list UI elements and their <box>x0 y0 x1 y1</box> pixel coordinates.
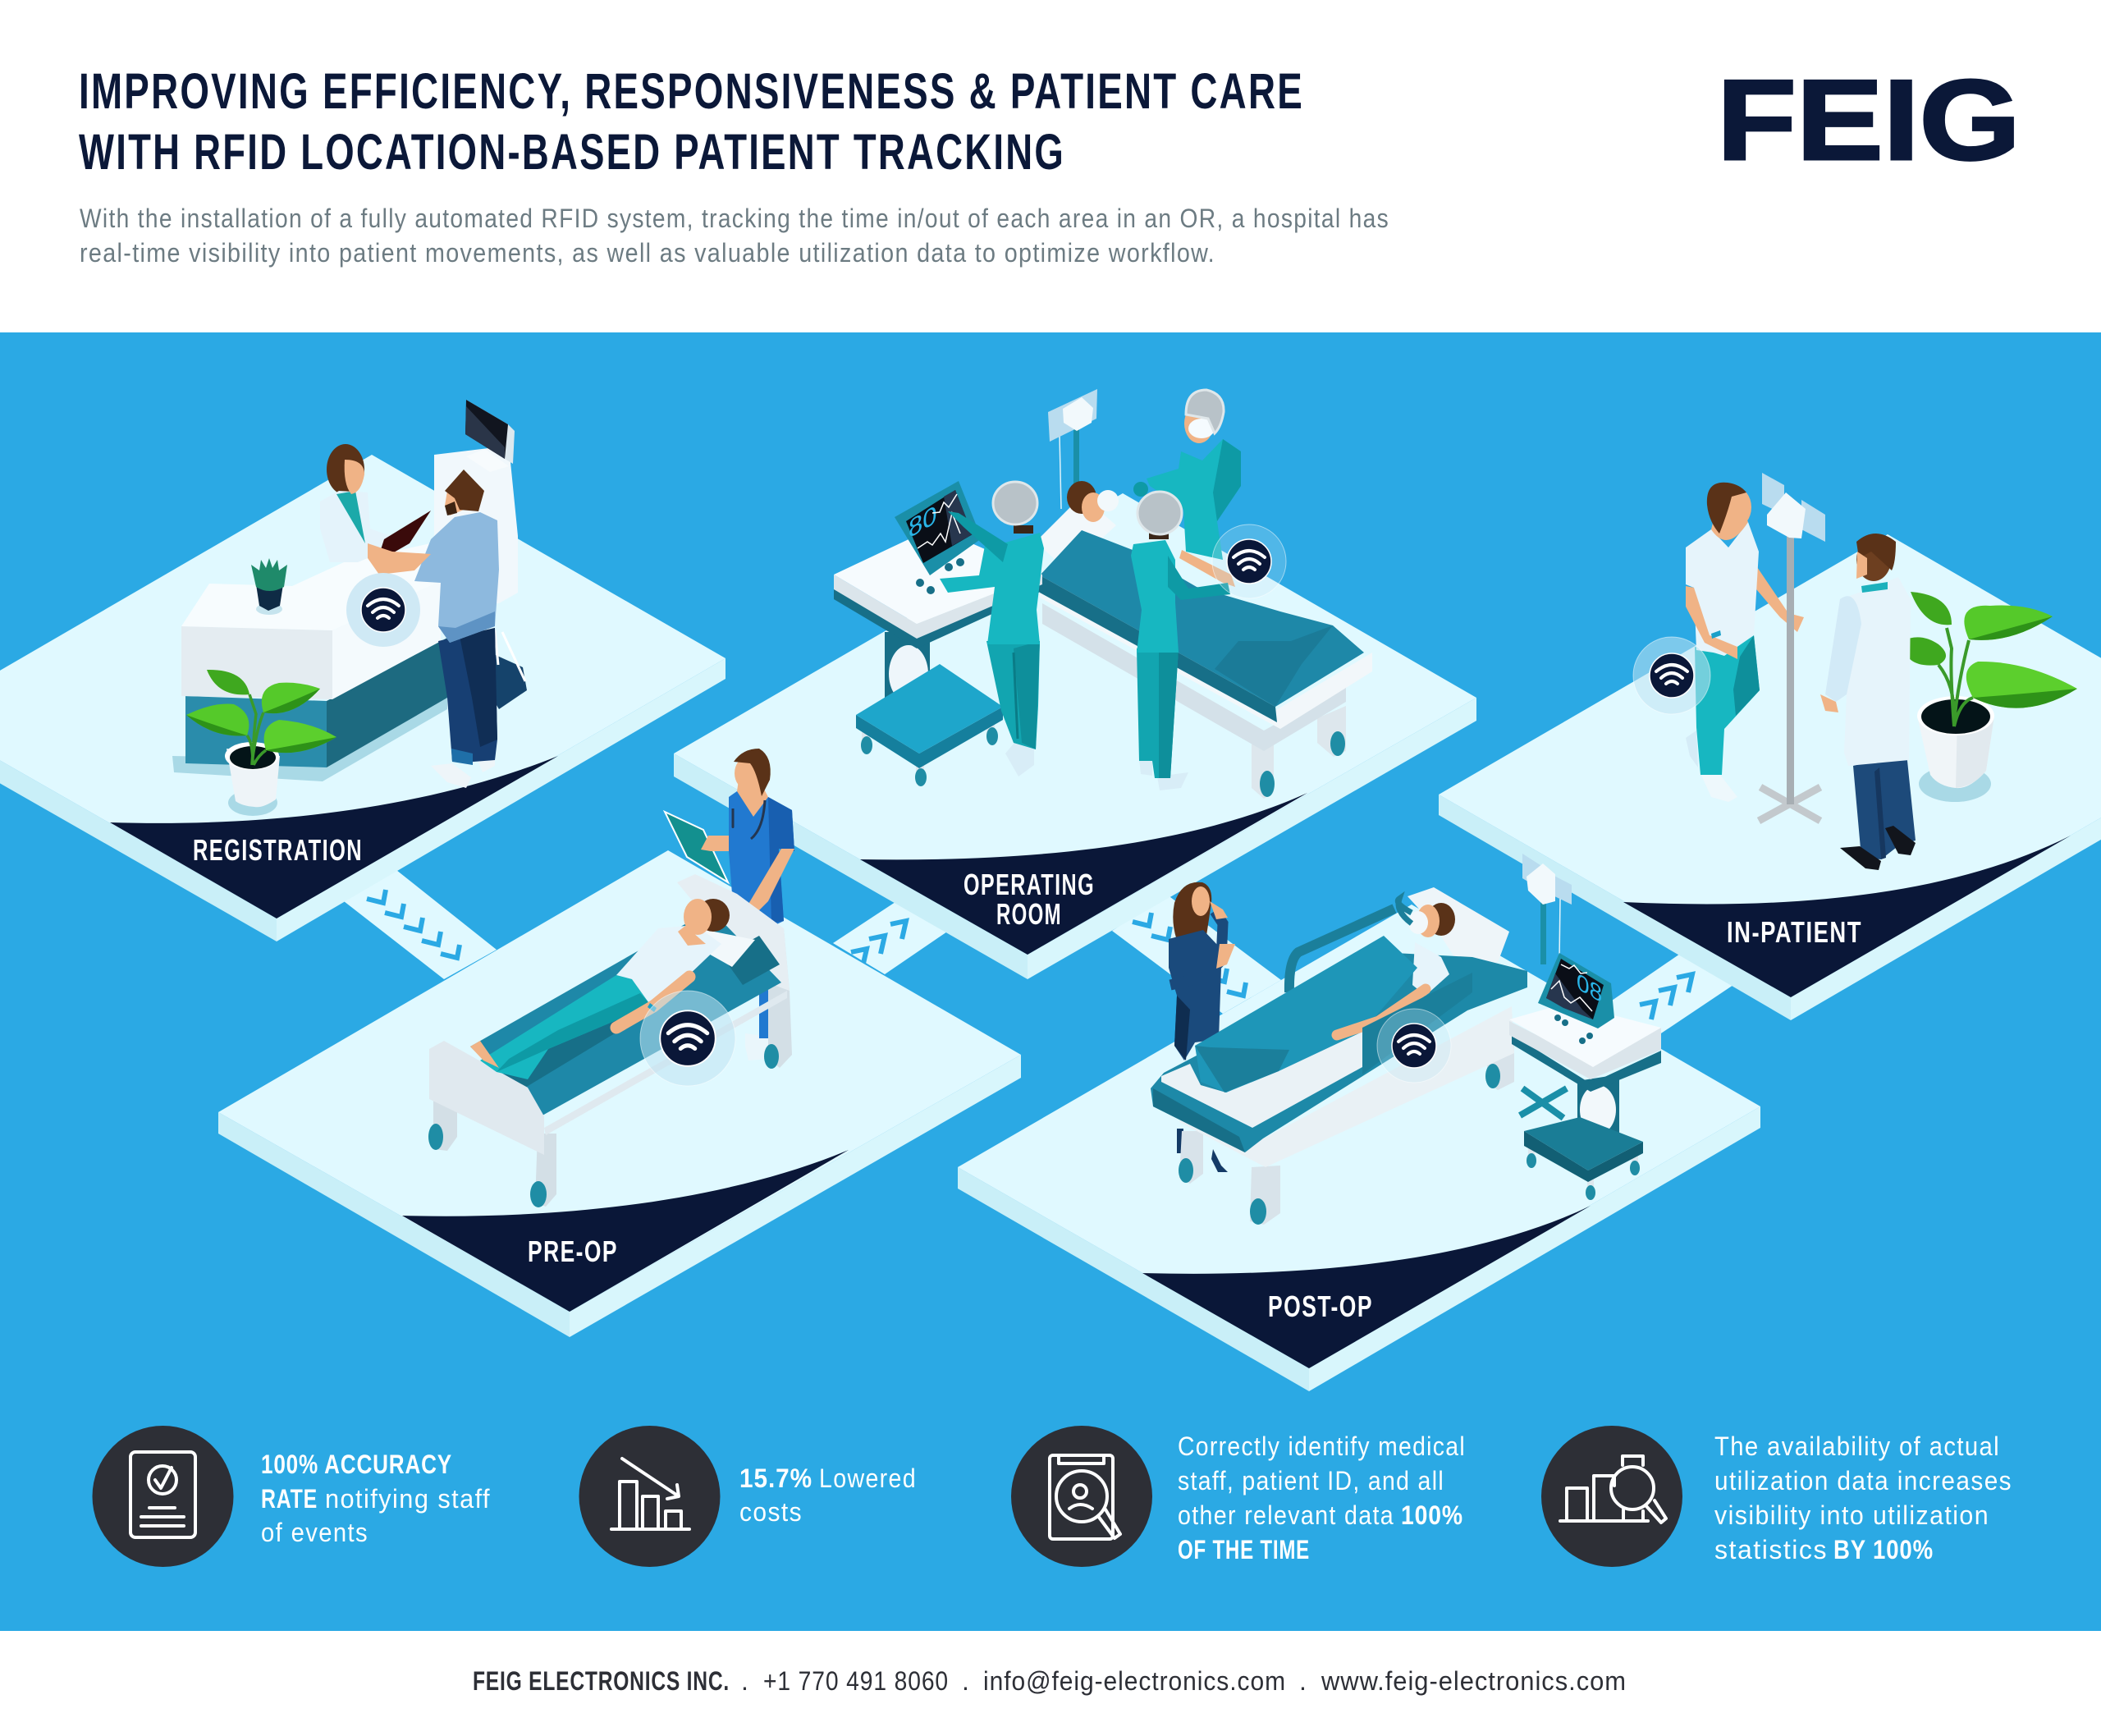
text: accuracy: RATE <box>261 1484 318 1514</box>
desk plant <box>251 558 287 615</box>
tower with monitor <box>434 400 518 603</box>
panel: pre-op <box>218 749 1021 1337</box>
icon: chart magnifier <box>1541 1426 1682 1567</box>
platform: registration <box>0 455 726 941</box>
text: accuracy: notifying staff <box>325 1484 491 1514</box>
patient monitor cart: post-op: 08 <box>1577 969 1602 1008</box>
footer <box>473 1666 1627 1696</box>
person: patient on bed <box>470 899 755 1079</box>
IV pole: operating room <box>1048 389 1097 509</box>
footer: +1 770 491 8060 <box>763 1666 949 1696</box>
stat: utilization <box>1541 1426 2012 1567</box>
text: lowered costs: costs <box>739 1497 803 1527</box>
panel: operating room <box>674 389 1476 979</box>
logo: FEIG: FEIG <box>1717 57 2021 184</box>
person: patient with IV pole <box>1686 483 1804 802</box>
label banner: pre-op: PRE-OP <box>528 1234 618 1268</box>
text: identify staff: other relevant data <box>1178 1500 1394 1530</box>
panel: registration <box>0 400 726 941</box>
connector: operating room to post-op <box>1112 895 1281 1014</box>
stat: accuracy <box>92 1426 491 1567</box>
label banner: in-patient <box>1623 836 2071 997</box>
platform: pre-op <box>218 850 1021 1337</box>
IV pole: in-patient <box>1759 473 1825 821</box>
person: patient on post-op bed <box>1195 899 1472 1092</box>
icon: RFID pre-op <box>640 991 735 1086</box>
title <box>79 63 1304 180</box>
icon: ID magnifier <box>1011 1426 1152 1567</box>
label banner: post-op: POST-OP <box>1268 1289 1373 1323</box>
person: receptionist <box>320 444 391 562</box>
icon: checked document <box>92 1426 233 1567</box>
patient monitor cart: operating room <box>834 481 1042 786</box>
text: accuracy <box>261 1450 491 1547</box>
footer: FEIG ELECTRONICS INC. <box>473 1666 730 1696</box>
text: utilization: statistics <box>1714 1535 1828 1564</box>
text: utilization: The availability of actual <box>1714 1431 2000 1461</box>
text: identify staff: 100% <box>1401 1500 1463 1530</box>
patient monitor cart: post-op <box>1509 953 1661 1200</box>
label banner: post-op <box>1142 1206 1591 1368</box>
text: identify staff: Correctly identify medical <box>1178 1431 1466 1461</box>
text: lowered costs: 15.7% <box>739 1463 812 1493</box>
label banner: in-patient: IN-PATIENT <box>1727 915 1862 949</box>
label banner: registration <box>110 756 558 918</box>
label banner: operating room: ROOM <box>996 897 1062 931</box>
intro text <box>80 204 1389 268</box>
plant: in-patient <box>1902 592 2077 802</box>
icon: RFID in-patient <box>1633 637 1710 714</box>
text: identify staff: staff, patient ID, and all <box>1178 1466 1444 1496</box>
text: utilization: BY 100% <box>1833 1535 1934 1564</box>
footer: . <box>962 1666 970 1696</box>
blue band <box>0 332 2101 1631</box>
text: identify staff: OF THE TIME <box>1178 1535 1310 1564</box>
text: identify staff <box>1178 1431 1466 1564</box>
stat: lowered costs <box>579 1426 917 1567</box>
footer: info@feig-electronics.com <box>983 1666 1286 1696</box>
IV pole: post-op <box>1522 854 1572 964</box>
connector: pre-op to operating room <box>833 899 952 974</box>
platform: post-op <box>958 905 1760 1391</box>
stat: identify staff <box>1011 1426 1466 1567</box>
connector: registration to pre-op <box>344 870 497 979</box>
platform: operating room <box>674 493 1476 979</box>
person: doctor <box>1820 534 1916 870</box>
text: utilization: utilization data increases <box>1714 1466 2012 1496</box>
title: WITH RFID LOCATION-BASED PATIENT TRACKING <box>79 124 1065 180</box>
title: IMPROVING EFFICIENCY, RESPONSIVENESS & PATIENT CARE <box>79 63 1304 119</box>
connector: post-op to in-patient <box>1596 952 1736 1042</box>
text: lowered costs <box>739 1463 917 1527</box>
patient bed: operating room <box>1036 481 1372 799</box>
person: nurse at monitor <box>940 482 1044 776</box>
footer: www.feig-electronics.com <box>1321 1666 1627 1696</box>
icon: RFID registration <box>346 573 420 647</box>
text: utilization: visibility into utilization <box>1714 1500 1989 1530</box>
icon: falling bar chart <box>579 1426 721 1567</box>
hospital bed: post-op <box>1151 887 1527 1225</box>
patient monitor cart: operating room: 80 <box>909 500 936 544</box>
label banner: operating room: OPERATING <box>964 868 1095 901</box>
panel: post-op <box>958 854 1760 1391</box>
person: visitor woman <box>1169 882 1235 1172</box>
footer: . <box>741 1666 749 1696</box>
person: nurse at patient side <box>1131 492 1235 790</box>
person: nurse <box>665 749 794 1060</box>
reception desk <box>172 542 447 781</box>
person: surgeon at head of bed <box>1133 390 1241 560</box>
intro text: real-time visibility into patient movements, as well as valuable utilization data to optimize workflow. <box>80 238 1215 268</box>
text: accuracy: 100% ACCURACY <box>261 1450 452 1479</box>
panel: in-patient <box>1439 473 2101 1020</box>
label banner: operating room <box>860 793 1307 955</box>
label banner: pre-op <box>402 1150 849 1312</box>
text: utilization <box>1714 1431 2012 1564</box>
text: lowered costs: Lowered <box>819 1463 917 1493</box>
hospital bed: pre-op <box>428 874 792 1207</box>
icon: RFID operating room <box>1212 524 1286 598</box>
person: customer <box>368 469 527 788</box>
footer: . <box>1299 1666 1307 1696</box>
icon: RFID post-op <box>1377 1009 1451 1083</box>
text: accuracy: of events <box>261 1518 368 1547</box>
platform: in-patient <box>1439 534 2101 1020</box>
label banner: registration: REGISTRATION <box>193 833 363 867</box>
floor plant <box>186 670 336 816</box>
intro text: With the installation of a fully automated RFID system, tracking the time in/out of each area in an OR, a hospital has <box>80 204 1389 233</box>
